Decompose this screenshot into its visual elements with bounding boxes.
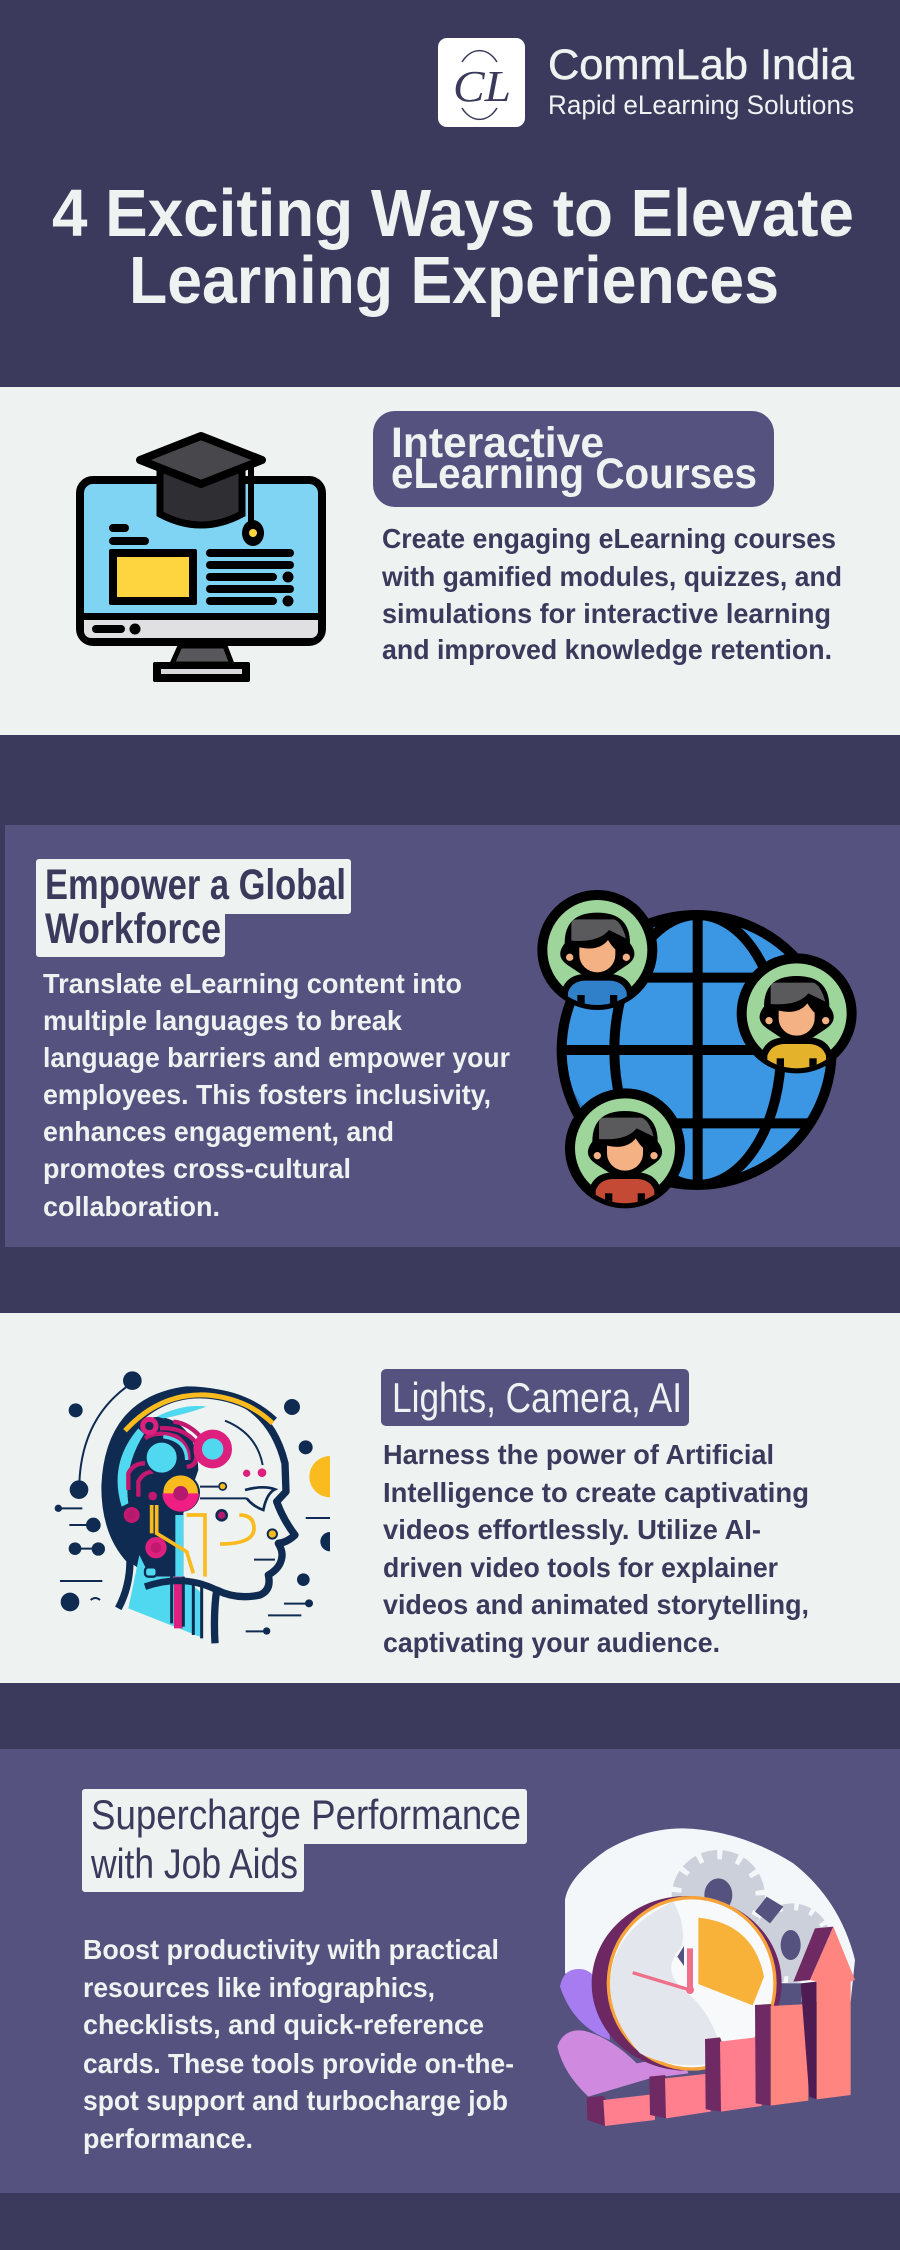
leaves [560, 1969, 610, 2040]
heading box: Workforce [45, 905, 221, 953]
heading pill [373, 411, 774, 507]
logo badge: CL [453, 62, 511, 111]
logo tagline: Rapid eLearning Solutions [548, 90, 854, 120]
body text: performance. [83, 2123, 253, 2154]
body text: language barriers and empower your [43, 1042, 510, 1073]
clock [592, 1896, 782, 2071]
bg gap under arrow [775, 1983, 802, 2005]
body text: Create engaging eLearning courses [382, 523, 836, 554]
title: 4 Exciting Ways to Elevate [52, 176, 854, 251]
panel: empower a global workforce [5, 825, 900, 1247]
person yellow [742, 958, 852, 1072]
body text: and improved knowledge retention. [382, 634, 832, 665]
heading box [36, 859, 351, 957]
neck lines [174, 1577, 183, 1628]
body text: spot support and turbocharge job [83, 2085, 508, 2116]
body text [43, 968, 510, 1222]
body text: Harness the power of Artificial [383, 1439, 774, 1470]
arrow [793, 1927, 855, 2099]
body text: videos effortlessly. Utilize AI- [383, 1514, 761, 1545]
gears [677, 1855, 828, 1979]
icon: AI circuit head [55, 1371, 330, 1643]
body text: promotes cross-cultural [43, 1153, 351, 1184]
cyan fill [128, 1555, 202, 1637]
body text: cards. These tools provide on-the- [83, 2048, 514, 2079]
yellow arc [125, 1393, 273, 1430]
person red [570, 1093, 680, 1207]
body text: Boost productivity with practical [83, 1934, 499, 1965]
body text: videos and animated storytelling, [383, 1589, 809, 1620]
body text [383, 1439, 809, 1658]
face details [225, 1421, 263, 1465]
floating dots [55, 1371, 330, 1635]
logo badge [438, 38, 525, 127]
body text: enhances engagement, and [43, 1116, 394, 1147]
panel: lights camera AI [0, 1313, 900, 1683]
heading pill: Interactive [391, 419, 604, 467]
icon: clock, gears and rising bars [557, 1828, 855, 2126]
body text: multiple languages to break [43, 1005, 403, 1036]
body text: Translate eLearning content into [43, 968, 462, 999]
body text: simulations for interactive learning [382, 598, 831, 629]
heading pill: eLearning Courses [391, 450, 757, 498]
heading box: Lights, Camera, AI [392, 1374, 682, 1421]
heading box: with Job Aids [90, 1840, 298, 1887]
body text: with gamified modules, quizzes, and [381, 561, 842, 592]
body text [381, 523, 842, 665]
bars [587, 2004, 808, 2126]
head outline [105, 1390, 295, 1643]
body text: Intelligence to create captivating [383, 1477, 809, 1508]
circuits [128, 1419, 205, 1577]
thick back of skull and brain fill [102, 1417, 198, 1577]
icon: globe with three people [542, 895, 852, 1207]
heading box: Supercharge Performance [91, 1791, 521, 1838]
body text: checklists, and quick-reference [83, 2009, 484, 2040]
title: Learning Experiences [129, 243, 779, 318]
body text: captivating your audience. [383, 1627, 720, 1658]
title [52, 176, 854, 318]
logo name: CommLab India [548, 41, 854, 89]
body text: driven video tools for explainer [383, 1552, 778, 1583]
panel: supercharge performance [0, 1749, 900, 2193]
person blue [542, 895, 652, 1008]
icon: monitor with graduation cap [80, 436, 322, 682]
globe [553, 910, 840, 1193]
body text [83, 1934, 514, 2154]
body text: resources like infographics, [83, 1972, 435, 2003]
body text: collaboration. [43, 1191, 220, 1222]
heading box [82, 1789, 527, 1892]
heading box: Empower a Global [45, 861, 346, 909]
header [0, 0, 900, 387]
backdrop blob [565, 1828, 855, 2002]
panel: interactive eLearning courses [0, 387, 900, 735]
body text: employees. This fosters inclusivity, [43, 1079, 491, 1110]
